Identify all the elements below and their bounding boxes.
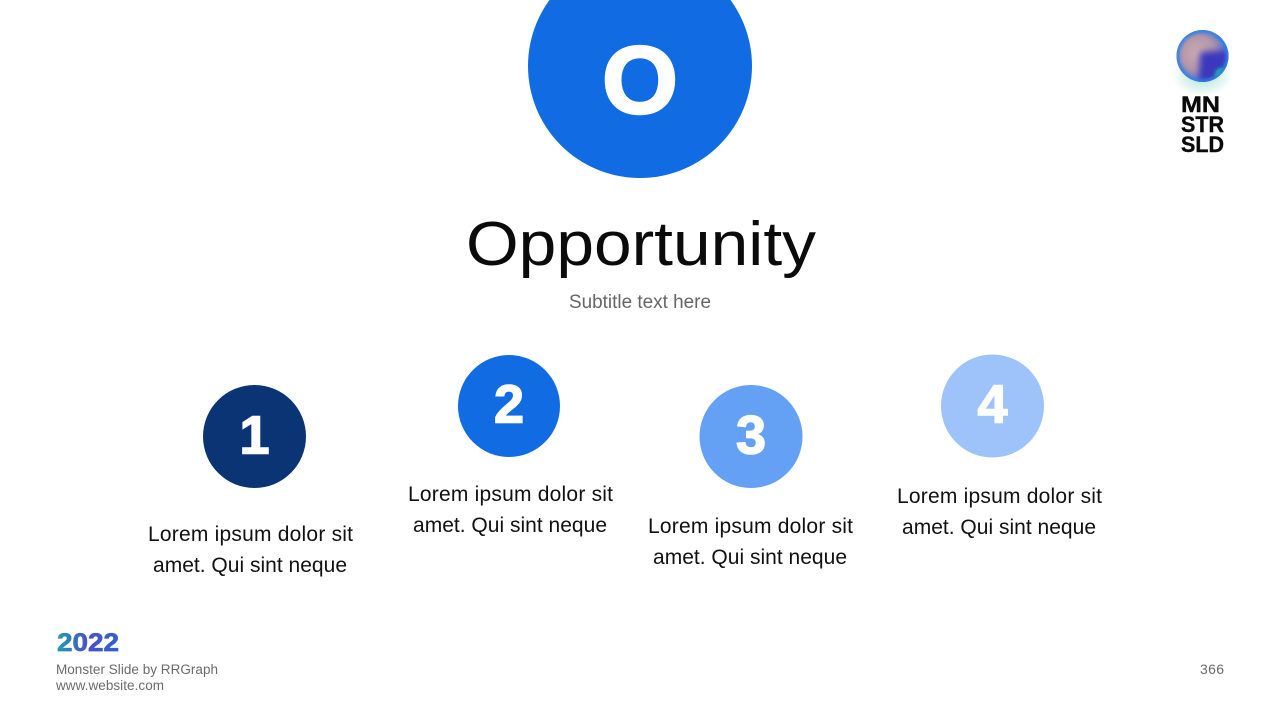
text 2: Lorem ipsum dolor sit (408, 483, 613, 506)
icon: gradient orb (1175, 30, 1230, 94)
badge 4 (941, 354, 1044, 458)
subtitle: Subtitle text here (569, 292, 711, 313)
large circle with letter O (528, 0, 752, 178)
text 2 (408, 483, 613, 537)
item 4 (897, 354, 1102, 539)
text 1: Lorem ipsum dolor sit (148, 523, 353, 546)
text 4 (897, 485, 1102, 539)
logo wordmark: SLD (1181, 132, 1224, 157)
logo wordmark: STR (1181, 112, 1224, 137)
large circle with letter O: O (602, 27, 678, 134)
logo wordmark: MN (1181, 92, 1220, 117)
item 2 (408, 355, 613, 537)
text 2: amet. Qui sint neque (413, 514, 607, 537)
text 3: Lorem ipsum dolor sit (648, 515, 853, 538)
badge 1 (203, 385, 306, 488)
badge 2 (458, 355, 560, 457)
year: 2022 (57, 629, 119, 657)
badge 1: 1 (239, 406, 270, 466)
logo (1175, 30, 1230, 152)
text 3: amet. Qui sint neque (653, 546, 847, 569)
logo wordmark (1181, 92, 1224, 157)
text 1: amet. Qui sint neque (153, 554, 347, 577)
item 1 (148, 385, 353, 577)
badge 3 (700, 385, 802, 488)
text 4: amet. Qui sint neque (902, 516, 1096, 539)
title: Opportunity (466, 210, 816, 279)
footer credit: Monster Slide by RRGraph (56, 662, 218, 677)
text 4: Lorem ipsum dolor sit (897, 485, 1102, 508)
text 3 (648, 515, 853, 569)
badge 4: 4 (977, 374, 1008, 434)
footer credit: www.website.com (55, 678, 164, 693)
badge 3: 3 (736, 406, 766, 466)
text 1 (148, 523, 353, 577)
badge 2: 2 (494, 374, 524, 434)
item 3 (648, 385, 853, 569)
footer credit (55, 662, 218, 693)
page number: 366 (1200, 661, 1224, 677)
